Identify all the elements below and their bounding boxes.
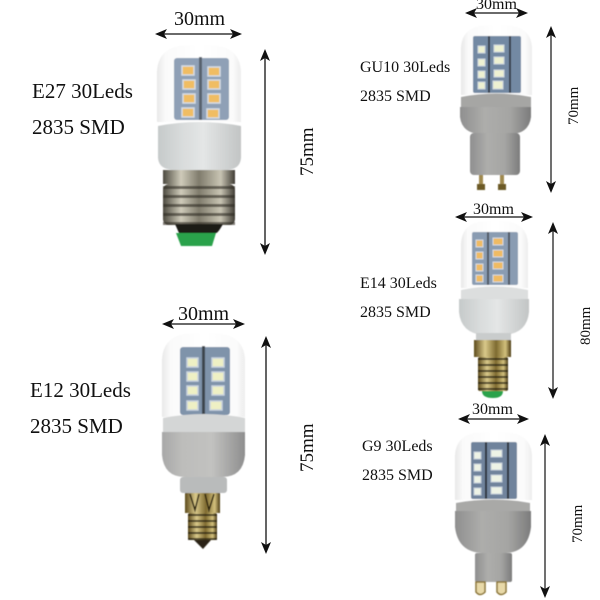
text: E12 specification <box>30 378 131 438</box>
height label: 70mm: 70mm <box>566 86 582 125</box>
text: E27 specification: 2835 SMD <box>32 115 125 139</box>
text: G9 specification: 2835 SMD <box>362 467 433 484</box>
text: GU10 specification <box>360 59 450 105</box>
panel: G9 bulb <box>362 401 586 596</box>
text: E14 specification <box>360 275 437 321</box>
width label: 30mm: 30mm <box>178 303 230 325</box>
arrow: width <box>457 216 531 218</box>
arrow: width <box>164 323 243 325</box>
arrow: height <box>552 224 554 397</box>
width label: 30mm: 30mm <box>174 8 226 30</box>
text: E27 specification <box>32 79 133 139</box>
height label: 75mm: 75mm <box>297 423 318 472</box>
width label: 30mm: 30mm <box>473 201 514 218</box>
panel: GU10 bulb <box>360 0 582 191</box>
panel: E27 bulb <box>32 8 318 253</box>
icon: GU10 bulb photo <box>460 25 532 190</box>
width label: 30mm: 30mm <box>472 401 513 418</box>
arrow: width <box>467 12 526 14</box>
arrow: height <box>264 51 266 253</box>
panel: E14 bulb <box>360 201 594 398</box>
text: E27 specification: E27 30Leds <box>32 79 133 103</box>
icon: E12 bulb photo <box>162 333 245 549</box>
panel: E12 bulb <box>30 303 318 552</box>
height label: 70mm: 70mm <box>570 504 586 543</box>
icon: G9 bulb photo <box>455 432 532 594</box>
text: E12 specification: E12 30Leds <box>30 378 131 402</box>
text: E14 specification: 2835 SMD <box>360 304 431 321</box>
text: GU10 specification: 2835 SMD <box>360 88 431 105</box>
text: G9 specification: G9 30Leds <box>362 438 433 455</box>
icon: E27 bulb photo <box>157 45 241 246</box>
text: E12 specification: 2835 SMD <box>30 414 123 438</box>
arrow: height <box>550 28 552 191</box>
text: G9 specification <box>362 438 433 484</box>
text: GU10 specification: GU10 30Leds <box>360 59 450 76</box>
text: E14 specification: E14 30Leds <box>360 275 437 292</box>
arrow: width <box>460 418 527 420</box>
icon: E14 bulb photo <box>459 221 529 398</box>
arrow: width <box>157 33 240 35</box>
height label: 75mm: 75mm <box>297 127 318 176</box>
arrow: height <box>544 436 546 596</box>
arrow: height <box>265 338 267 552</box>
height label: 80mm: 80mm <box>578 306 594 345</box>
